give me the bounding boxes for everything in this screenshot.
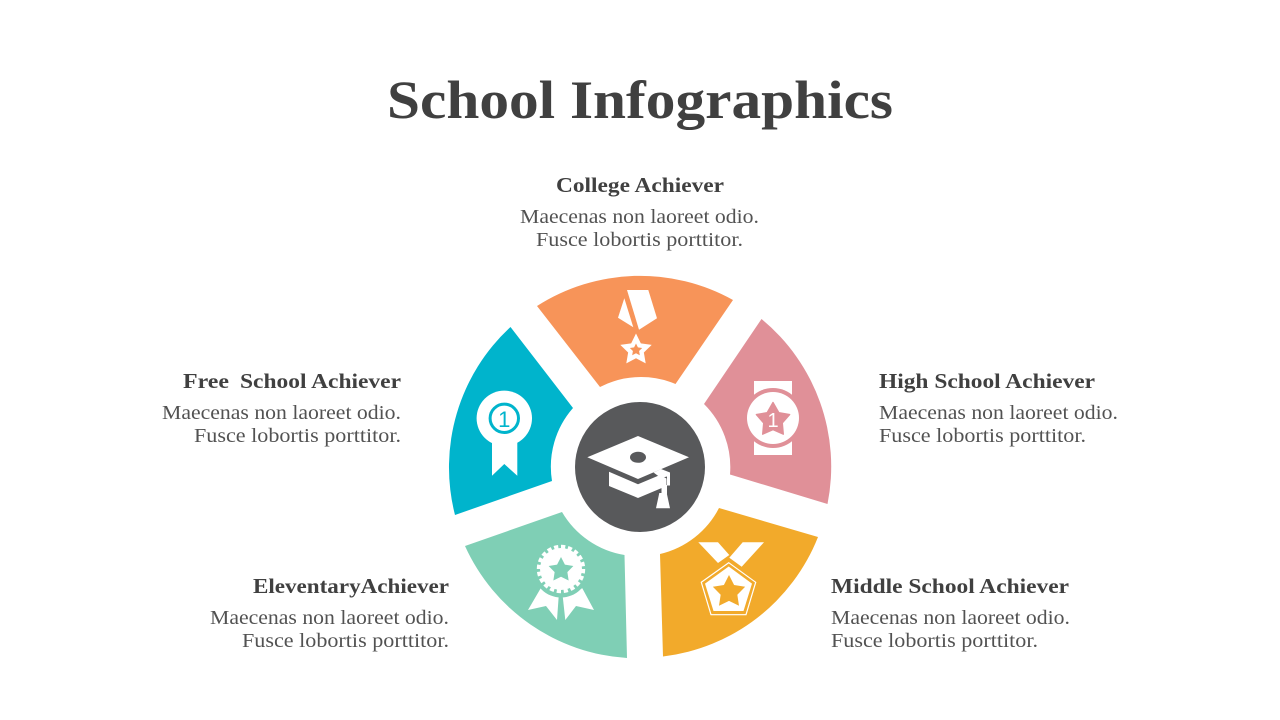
text block: Middle School Achiever: Middle School Achiever (831, 574, 1069, 598)
text block: Eleventary Achiever: Maecenas non laoreet odio. (210, 607, 449, 629)
panel: blue segment (449, 327, 573, 515)
panel: gold segment (660, 508, 818, 656)
text block: High School Achiever: High School Achiever (879, 369, 1095, 393)
icon: medal on orange segment (618, 290, 657, 363)
text block: High School Achiever: Fusce lobortis porttitor. (879, 425, 1086, 447)
panel: green segment (465, 512, 627, 658)
text block: Middle School Achiever: Maecenas non laoreet odio. (831, 607, 1070, 629)
icon: star badge on pink segment (743, 381, 803, 455)
text block: Middle School Achiever: Fusce lobortis porttitor. (831, 630, 1038, 652)
text block: College Achiever: Fusce lobortis porttitor. (536, 229, 743, 251)
text block: Free School Achiever: Free (183, 369, 229, 393)
icon: rosette on green segment (528, 542, 594, 620)
text block: College Achiever: College Achiever (556, 173, 724, 197)
text block: High School Achiever: Maecenas non laoreet odio. (879, 402, 1118, 424)
text block: Eleventary Achiever: EleventaryAchiever (253, 574, 449, 598)
panel: pink segment (704, 319, 831, 504)
text block: Free School Achiever (162, 369, 401, 447)
text block: Eleventary Achiever: Fusce lobortis porttitor. (242, 630, 449, 652)
icon: star badge on pink segment: 1 (767, 410, 779, 432)
centre circle with graduation cap icon (575, 402, 705, 532)
text block: Free School Achiever: Maecenas non laoreet odio. (162, 402, 401, 424)
icon: number one ribbon on blue segment (477, 391, 532, 476)
icon: pentagon medal on gold segment (698, 542, 764, 615)
text block: Free School Achiever: Fusce lobortis porttitor. (194, 425, 401, 447)
text block: High School Achiever (879, 369, 1118, 447)
text block: Eleventary Achiever (210, 574, 449, 652)
text block: Middle School Achiever (831, 574, 1070, 652)
text block: College Achiever: Maecenas non laoreet odio. (520, 206, 759, 228)
text block: College Achiever (520, 173, 759, 251)
icon: number one ribbon on blue segment: 1 (498, 407, 510, 432)
title: School Infographics (387, 70, 893, 130)
text block: Free School Achiever: School Achiever (240, 369, 401, 393)
panel: orange segment (537, 276, 733, 387)
